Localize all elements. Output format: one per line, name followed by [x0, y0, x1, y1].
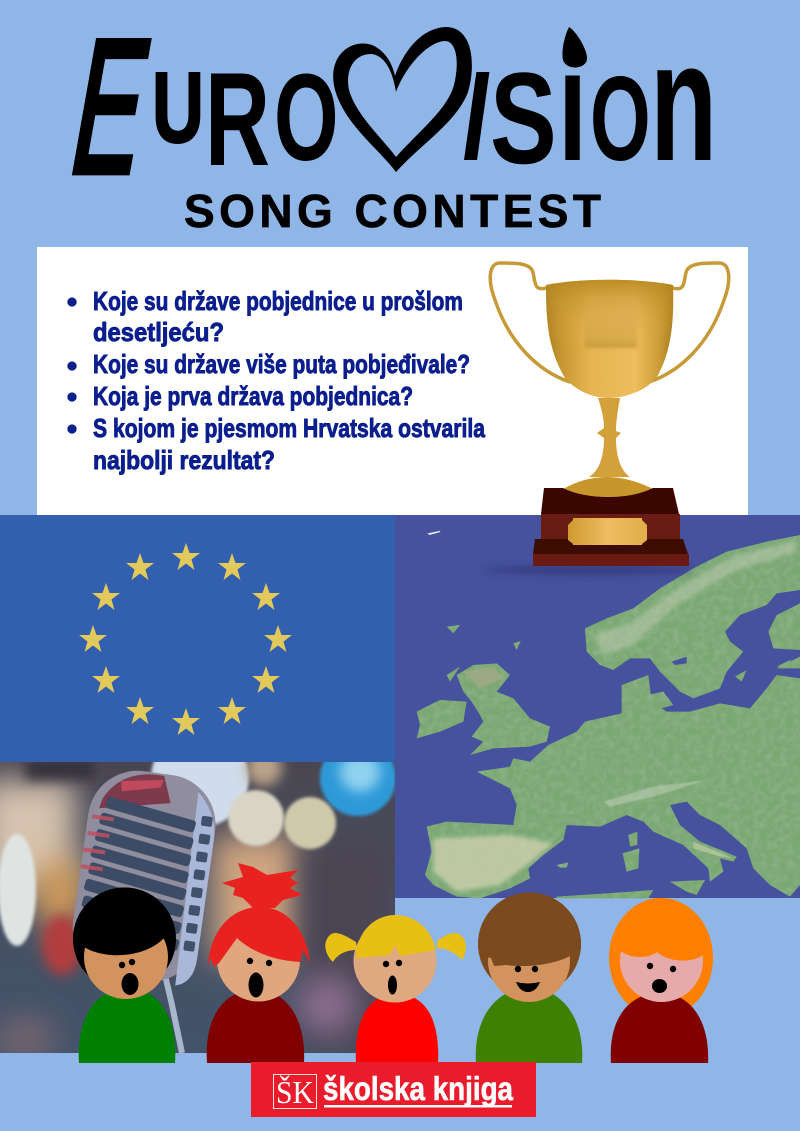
- trophy stem: [589, 398, 630, 477]
- logo emblem: ŠK: [276, 1074, 314, 1110]
- subtitle: Song Contest: SONG CONTEST: [184, 185, 601, 237]
- title: Eurovision logo: U: [152, 52, 204, 164]
- trophy: [485, 263, 729, 575]
- mountains and dry land shading: [427, 531, 797, 892]
- question list: desetljeću?: [93, 317, 224, 347]
- singer 5: orange hair, dark red top: [609, 895, 713, 1063]
- title: Eurovision logo: [59, 0, 717, 213]
- title: Eurovision logo: R: [205, 46, 270, 194]
- title: Eurovision logo: n: [650, 7, 717, 197]
- title: Eurovision logo: E: [59, 0, 163, 213]
- question list: najbolji rezultat?: [93, 445, 275, 475]
- singers: [70, 863, 713, 1063]
- microphone stand: [165, 975, 182, 1053]
- title: Eurovision logo: i: [558, 15, 587, 194]
- question list: Koje su države više puta pobjeđivale?: [93, 349, 470, 379]
- panel: EU flag: [0, 515, 395, 762]
- singer 2: red hair, dark red top: [207, 863, 310, 1063]
- icon: heart in logo: [333, 27, 472, 172]
- singer 1: black hair, green top: [73, 888, 176, 1063]
- publisher logo: [251, 1062, 536, 1117]
- panel: questions: [37, 247, 748, 515]
- panel: microphone photo: [0, 762, 395, 1053]
- bokeh lights: [0, 762, 395, 1053]
- flag stars: [79, 543, 292, 735]
- name plaque: [568, 518, 647, 545]
- question list: [68, 286, 485, 475]
- title: Eurovision logo: I: [454, 44, 499, 188]
- trophy base: [533, 488, 689, 566]
- singer 3: blonde pigtails, red top: [325, 915, 466, 1063]
- question list: Koje su države pobjednice u prošlom: [93, 286, 463, 316]
- trophy shadow: [485, 565, 695, 575]
- panel: satellite map of Europe: [395, 515, 800, 898]
- title: Eurovision logo: O: [590, 52, 651, 186]
- singer 4: brown hair, green top: [476, 892, 582, 1063]
- land masses: [417, 535, 800, 898]
- trophy handles: [490, 263, 729, 382]
- title: Eurovision logo: O: [274, 50, 339, 187]
- question list: S kojom je pjesmom Hrvatska ostvarila: [93, 413, 485, 443]
- trophy foot: [563, 477, 653, 497]
- trophy cup: [546, 280, 673, 398]
- logo wordmark: školska knjiga: [323, 1070, 514, 1107]
- question list: Koja je prva država pobjednica?: [93, 381, 413, 411]
- title: Eurovision logo: S: [490, 45, 557, 191]
- microphone: [72, 770, 216, 986]
- icon: teardrop dot of the i: [562, 27, 587, 68]
